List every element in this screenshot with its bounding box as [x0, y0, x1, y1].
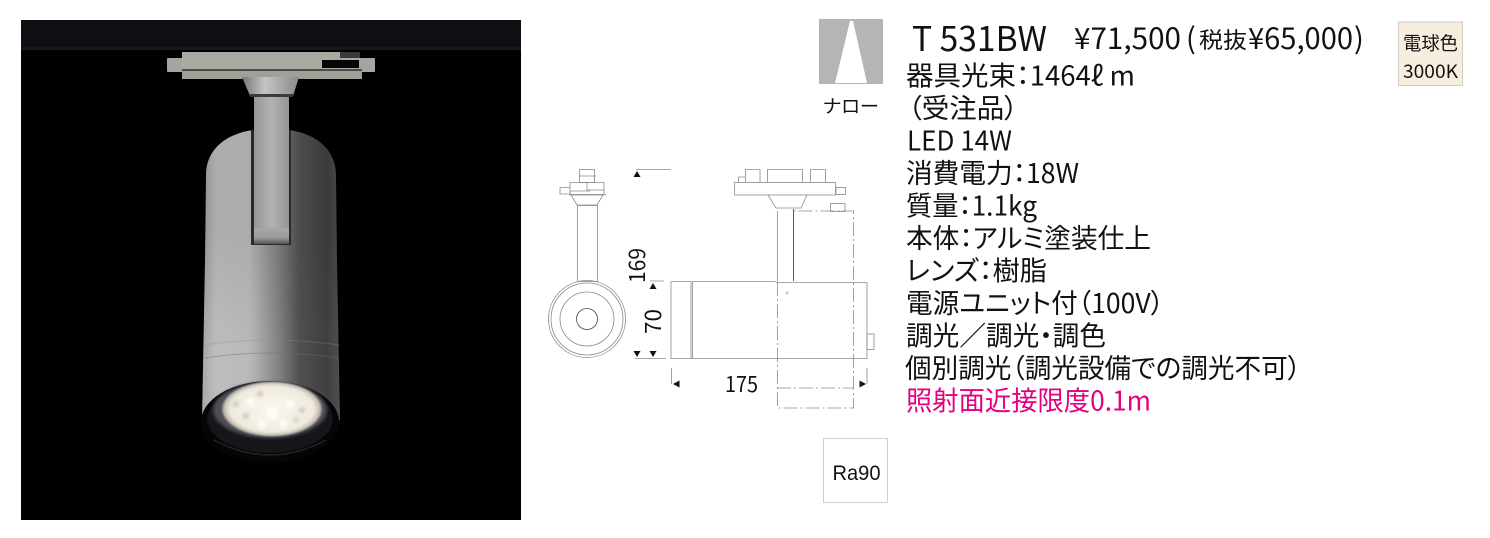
- panel: product photo: [21, 20, 521, 520]
- colour temperature badge: 3000K: [1403, 58, 1458, 84]
- specification list: 個別調光（調光設備での調光不可）: [905, 347, 1301, 386]
- price: ): [1354, 16, 1364, 58]
- dimension label 70: 70: [636, 309, 668, 334]
- specification list: 調光／調光・調色: [906, 315, 1106, 354]
- lens opening: [201, 381, 339, 463]
- dimension drawing: [548, 170, 874, 408]
- specification list: 器具光束：1464ℓ m: [906, 55, 1135, 94]
- dimension label 175: 175: [725, 367, 758, 399]
- lamp body cylinder: [202, 130, 340, 425]
- dimension label 169: 169: [620, 248, 652, 283]
- price: 税抜: [1199, 23, 1247, 55]
- specification list: （受注品）: [908, 87, 1018, 126]
- colour temperature badge: 電球色: [1403, 30, 1458, 56]
- specification list: 本体：アルミ塗装仕上: [906, 217, 1151, 256]
- front view of fixture: [671, 170, 874, 408]
- dimension lines: [635, 170, 867, 384]
- beam label: ナロー: [823, 93, 879, 119]
- lighting track: [21, 20, 521, 50]
- icon: Ra90 badge: [824, 438, 888, 502]
- track adapter: [167, 52, 375, 79]
- price: ¥65,000: [1248, 16, 1353, 58]
- icon: Ra90 badge: Ra90: [832, 462, 880, 485]
- specification list: LED 14W: [907, 120, 1012, 159]
- icon: narrow beam: [819, 19, 883, 84]
- specification list: 質量：1.1kg: [906, 185, 1037, 224]
- price: ¥71,500: [1074, 16, 1181, 58]
- specification list: 電源ユニット付（100V）: [906, 282, 1164, 321]
- side view of fixture: [548, 170, 626, 358]
- mounting arm: [242, 77, 299, 245]
- price: [1074, 16, 1364, 58]
- colour temperature badge: [1398, 22, 1462, 86]
- title: model number: T 531BW: [912, 12, 1047, 61]
- price: (: [1186, 16, 1196, 58]
- specification list: 照射面近接限度0.1m: [906, 380, 1151, 419]
- specification list: 消費電力：18W: [906, 152, 1079, 191]
- dimension arrows: [634, 171, 866, 388]
- specification list: レンズ：樹脂: [906, 250, 1047, 289]
- specification list: [905, 55, 1301, 419]
